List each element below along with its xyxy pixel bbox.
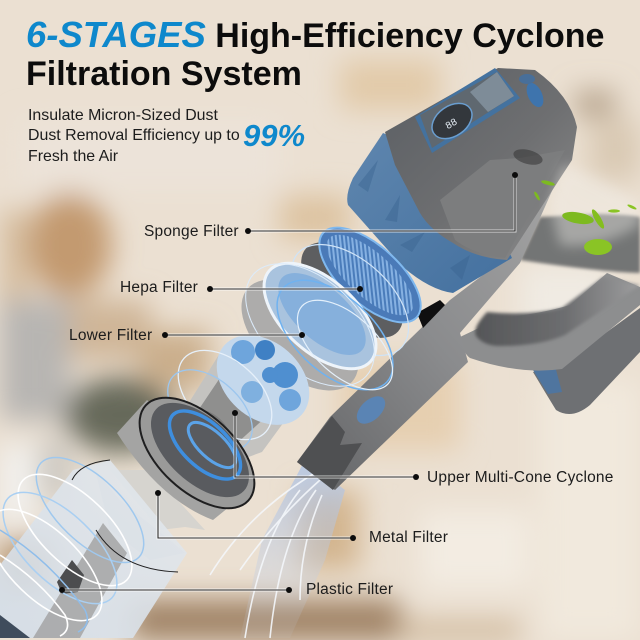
- part: hepa filter: [271, 211, 436, 377]
- device: head blue band: [347, 133, 512, 293]
- icon: air spray and leaves: [533, 165, 640, 255]
- device: vent holes: [512, 146, 544, 168]
- subtitle text: Dust Removal Efficiency up to: [28, 127, 240, 144]
- device: display panel: [415, 68, 547, 153]
- device: battery base: [533, 308, 640, 414]
- subtitle text: Fresh the Air: [28, 148, 118, 165]
- icon: airflow fan: [210, 460, 345, 638]
- callout lines: [62, 175, 515, 590]
- part: metal filter ring: [95, 377, 274, 560]
- label: plastic filter: Plastic Filter: [306, 581, 393, 598]
- label: metal filter: Metal Filter: [369, 529, 448, 546]
- title: Filtration System: [26, 55, 302, 93]
- label: sponge filter: Sponge Filter: [144, 223, 239, 240]
- device: head grey casing: [385, 68, 577, 260]
- icon: release button: [352, 391, 390, 429]
- title: [26, 14, 604, 93]
- subtitle text: [28, 107, 240, 165]
- label: lower filter: Lower Filter: [69, 327, 152, 344]
- part: upper multi-cone cyclone: [153, 317, 327, 471]
- label: upper multi-cone cyclone: Upper Multi-Cone Cyclone: [427, 469, 614, 486]
- label: hepa filter: Hepa Filter: [120, 279, 198, 296]
- subtitle text: Insulate Micron-Sized Dust: [28, 107, 218, 124]
- device: display panel: 88: [444, 117, 460, 133]
- device: main body plate: [297, 182, 556, 490]
- stat: 99%: 99%: [243, 118, 305, 153]
- part: plastic filter dust cup: [0, 440, 187, 639]
- device: handle loop: [460, 273, 640, 371]
- title: 6-STAGES High-Efficiency Cyclone: [26, 14, 604, 55]
- callout dots: [59, 172, 518, 593]
- part: lower filter: [221, 240, 412, 412]
- device: upper arm of handle: [520, 214, 640, 273]
